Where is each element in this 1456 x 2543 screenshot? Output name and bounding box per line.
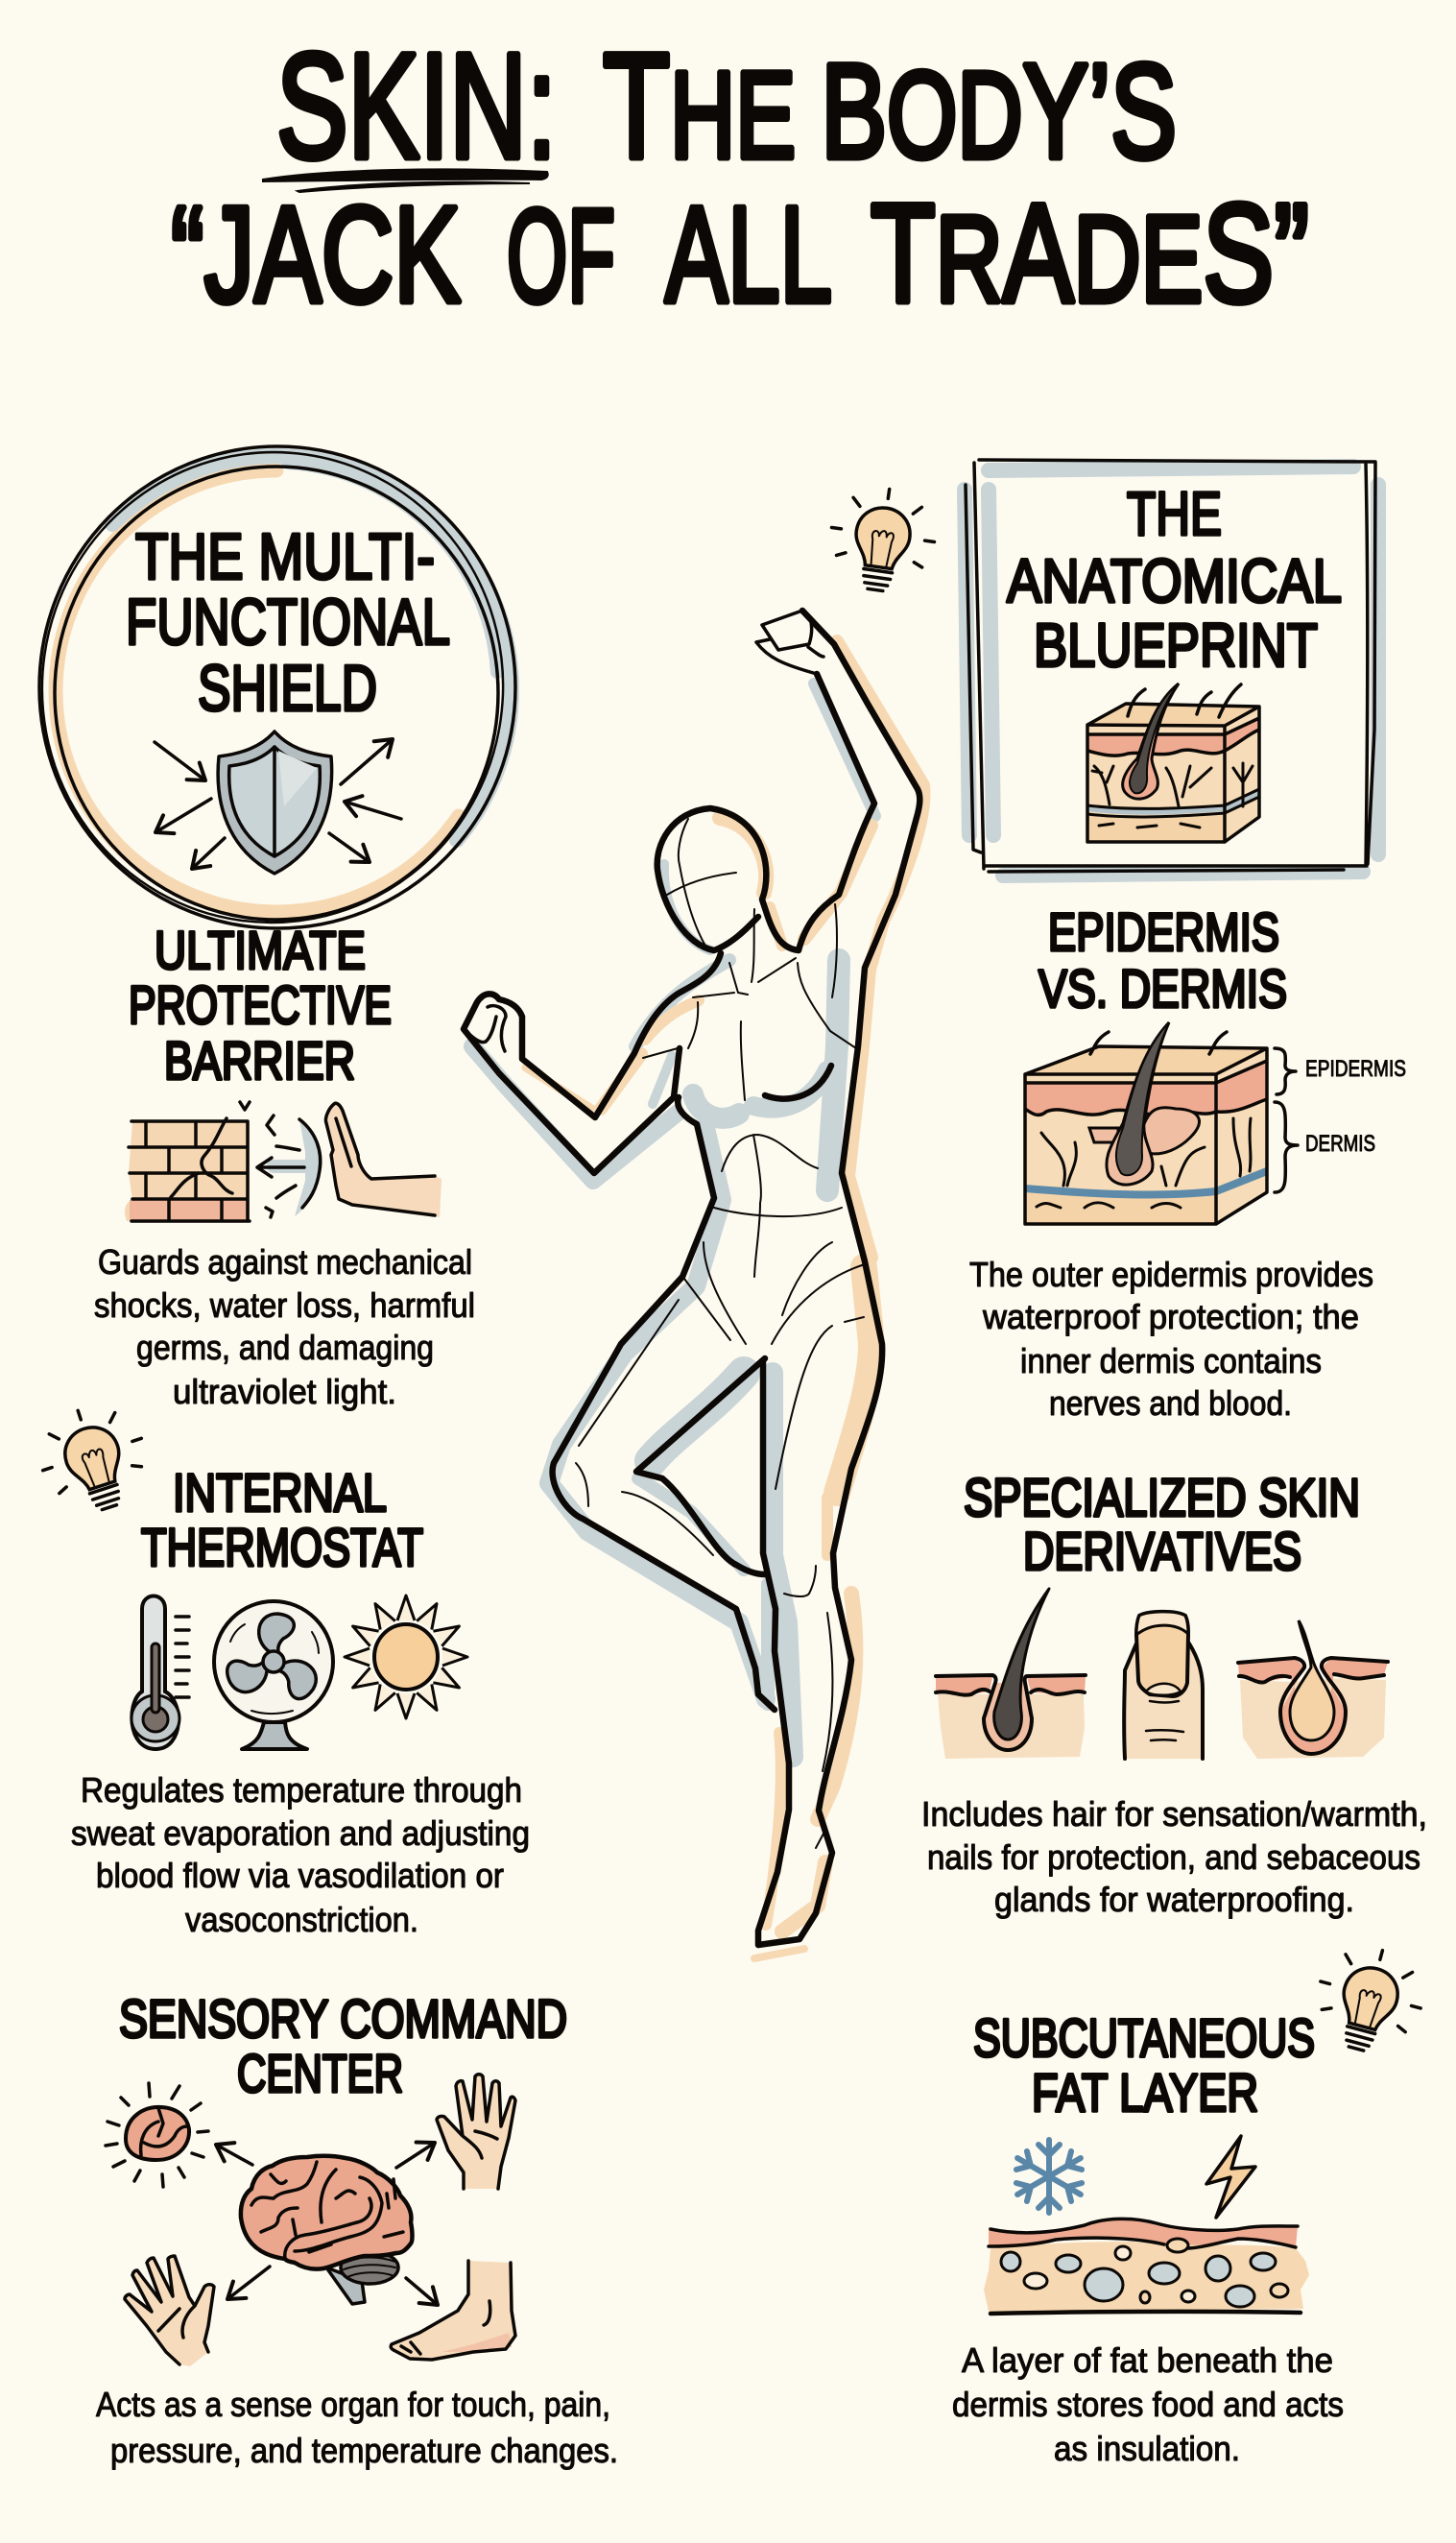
heading: DERIVATIVES (1023, 1521, 1301, 1581)
icon: snowflake (1013, 2140, 1086, 2213)
heading: SPECIALIZED SKIN (964, 1467, 1360, 1527)
heading: ANATOMICAL (1007, 546, 1342, 615)
heading: THERMOSTAT (141, 1517, 423, 1577)
panel: specialized skin derivatives (921, 1467, 1427, 1919)
title: THE BODY’S (603, 23, 1177, 190)
icon: labelled skin cross-section (1025, 1022, 1406, 1224)
icon: lightning bolt (1206, 2136, 1255, 2218)
panel: internal thermostat (71, 1462, 530, 1939)
heading: PROTECTIVE (129, 974, 392, 1035)
heading: FUNCTIONAL (126, 586, 450, 659)
heading: SHIELD (198, 652, 377, 725)
icon: thermometer (131, 1595, 189, 1749)
icon: fat layer cross-section (984, 2219, 1309, 2314)
icon: fingernail (1124, 1612, 1203, 1759)
body outline (464, 611, 919, 1945)
text block: Acts as a sense organ for touch, pain, (96, 2385, 610, 2424)
text block: blood flow via vasodilation or (96, 1856, 504, 1895)
heading: FAT LAYER (1032, 2062, 1258, 2123)
text block: dermis stores food and acts (952, 2385, 1344, 2424)
heading (1007, 479, 1342, 680)
heading: SENSORY COMMAND (119, 1988, 567, 2049)
title: OF (507, 182, 615, 330)
text block: as insulation. (1054, 2429, 1240, 2468)
heading: INTERNAL (173, 1462, 387, 1523)
text block (94, 1242, 475, 1411)
icon: hair follicle (936, 1589, 1086, 1759)
icon: skin cross-section block (1087, 684, 1259, 842)
text block: vasoconstriction. (185, 1900, 418, 1939)
title: ALL (665, 179, 832, 331)
heading (1038, 901, 1287, 1019)
heading: THE MULTI- (135, 520, 435, 593)
icon: labelled skin cross-section: DERMIS (1305, 1131, 1375, 1157)
panel: anatomical blueprint (965, 460, 1378, 876)
panel: epidermis vs. dermis (969, 901, 1406, 1423)
text block (96, 2385, 618, 2470)
heading: VS. DERMIS (1038, 958, 1287, 1019)
arrows (216, 2143, 438, 2305)
icon: light bulb top (823, 482, 941, 597)
heading: CENTER (237, 2043, 403, 2103)
text block: The outer epidermis provides (969, 1255, 1373, 1294)
heading (119, 1988, 567, 2103)
panel: sensory command center (96, 1988, 618, 2470)
icon: labelled skin cross-section: EPIDERMIS (1305, 1056, 1406, 1082)
icon: small glowing brain (106, 2083, 208, 2187)
text block: A layer of fat beneath the (962, 2340, 1333, 2380)
icon: shield with arrows (155, 732, 401, 874)
text block: Includes hair for sensation/warmth, (921, 1794, 1427, 1834)
body shading (472, 641, 923, 1958)
text block: pressure, and temperature changes. (110, 2431, 618, 2470)
title (171, 23, 1309, 331)
title: TRADES” (871, 175, 1309, 331)
panel: multi-functional shield (12, 422, 534, 952)
heading: BARRIER (164, 1030, 355, 1091)
icon: sun (345, 1595, 467, 1718)
panel: subcutaneous fat layer (952, 2007, 1344, 2468)
text block (921, 1794, 1427, 1919)
text block: Guards against mechanical (98, 1242, 472, 1282)
icon: left hand (125, 2256, 214, 2366)
text block (952, 2340, 1344, 2468)
text block: glands for waterproofing. (994, 1880, 1354, 1919)
icon: cracked brick wall (125, 1102, 442, 1221)
heading: BLUEPRINT (1034, 611, 1318, 680)
panel: ultimate protective barrier (94, 920, 475, 1411)
heading: EPIDERMIS (1048, 901, 1279, 962)
hand-drawn circle frame (12, 422, 534, 952)
heading: THE (1127, 479, 1222, 548)
text block (71, 1770, 530, 1939)
heading (141, 1462, 423, 1577)
figure: posed human body (464, 611, 923, 1958)
body contour lines (464, 611, 865, 1848)
icon: right hand (437, 2075, 515, 2189)
heading: SUBCUTANEOUS (973, 2007, 1315, 2068)
title: “JACK (171, 179, 461, 331)
icon: foot (391, 2261, 515, 2360)
text block: nails for protection, and sebaceous (927, 1837, 1420, 1877)
hand-drawn square frame (965, 460, 1378, 876)
text block: shocks, water loss, harmful (94, 1285, 475, 1325)
heading (126, 520, 450, 725)
icon: light bulb right (1306, 1937, 1433, 2062)
heading: ULTIMATE (155, 920, 366, 980)
heading (129, 920, 392, 1091)
text block: ultraviolet light. (173, 1372, 396, 1411)
text block: sweat evaporation and adjusting (71, 1813, 530, 1853)
heading (964, 1467, 1360, 1581)
text block (969, 1255, 1373, 1423)
icon: brain (241, 2156, 413, 2304)
text block: inner dermis contains (1020, 1341, 1322, 1380)
icon: light bulb left (29, 1395, 158, 1523)
icon: fan (214, 1601, 333, 1749)
text block: Regulates temperature through (81, 1770, 522, 1810)
text block: waterproof protection; the (982, 1297, 1359, 1336)
icon: sebaceous gland (1238, 1620, 1388, 1759)
text block: germs, and damaging (136, 1328, 434, 1367)
title: SKIN: (276, 23, 557, 190)
heading (973, 2007, 1315, 2123)
text block: nerves and blood. (1049, 1383, 1292, 1423)
